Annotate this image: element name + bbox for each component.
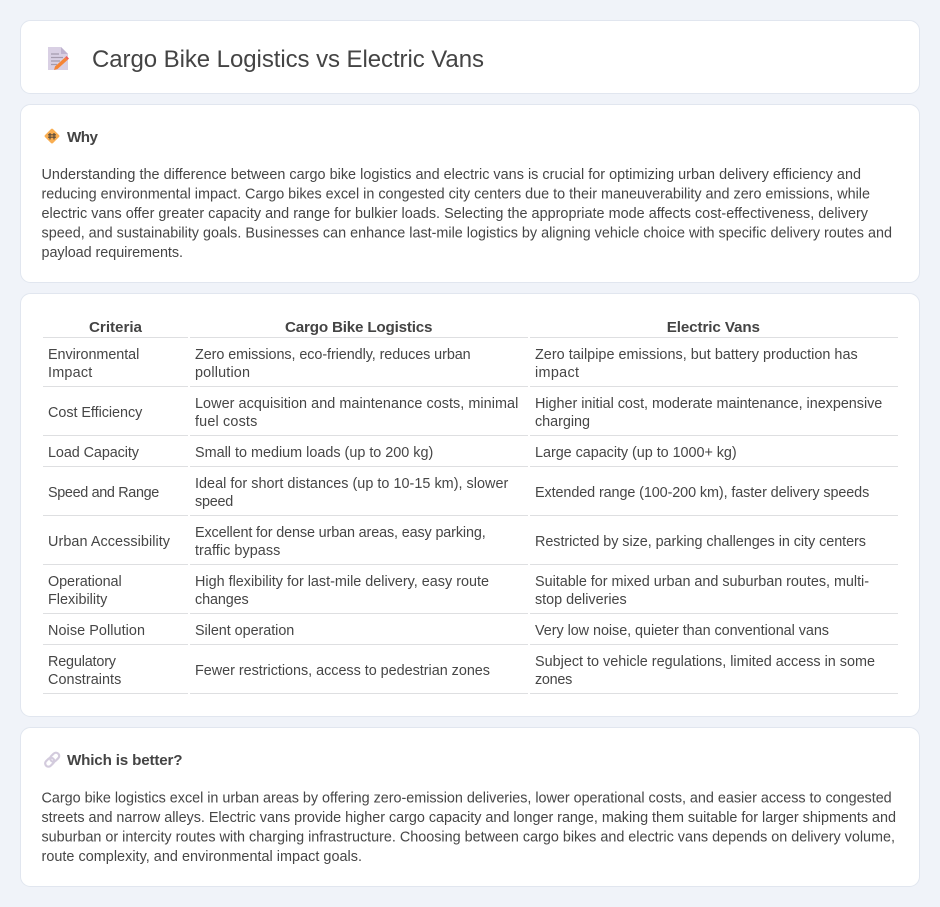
text block: which is better paragraph: route complexity, and environmental impact goals. bbox=[42, 849, 362, 865]
table header row: Criteria bbox=[89, 319, 143, 336]
row: environmental impact: Zero emissions, eco-friendly, reduces urban bbox=[195, 347, 471, 363]
table header row: Electric Vans bbox=[667, 319, 760, 336]
row: operational flexibility: stop deliveries bbox=[535, 592, 627, 608]
row: speed and range: Extended range (100-200 km), faster delivery speeds bbox=[535, 485, 869, 501]
row: operational flexibility: changes bbox=[195, 592, 249, 608]
row: load capacity bbox=[43, 445, 898, 467]
row: regulatory constraints: zones bbox=[535, 672, 572, 688]
row: cost efficiency bbox=[43, 396, 898, 436]
row: regulatory constraints: Fewer restrictions, access to pedestrian zones bbox=[195, 663, 490, 679]
row: load capacity: Large capacity (up to 1000+ kg) bbox=[535, 445, 737, 461]
title: Cargo Bike Logistics vs Electric Vans bbox=[92, 46, 484, 73]
table header row: Cargo Bike Logistics bbox=[285, 319, 432, 336]
row: operational flexibility: Suitable for mixed urban and suburban routes, multi- bbox=[535, 574, 869, 590]
row: load capacity: Small to medium loads (up to 200 kg) bbox=[195, 445, 433, 461]
row: cost efficiency: Higher initial cost, moderate maintenance, inexpensive bbox=[535, 396, 882, 412]
row: speed and range: speed bbox=[195, 494, 233, 510]
row: load capacity: Load Capacity bbox=[48, 445, 140, 461]
row: environmental impact: Impact bbox=[48, 365, 92, 381]
row: environmental impact: impact bbox=[535, 365, 579, 381]
row: operational flexibility bbox=[43, 574, 898, 614]
text block: why paragraph: electric vans offer greater capacity and range for bulkier loads. Selecting the appropriate mode affects cost-effectiveness, delivery bbox=[42, 206, 869, 222]
row: urban accessibility bbox=[43, 525, 898, 565]
text block: which is better paragraph: suburban or intercity routes with charging infrastructure. Choosing between cargo bikes and electric vans depends on delivery volume, bbox=[42, 830, 895, 846]
heading: why: Why bbox=[67, 129, 99, 146]
text block: why paragraph bbox=[42, 167, 892, 261]
row: operational flexibility: High flexibility for last-mile delivery, easy route bbox=[195, 574, 489, 590]
row: regulatory constraints: Constraints bbox=[48, 672, 121, 688]
row: noise pollution bbox=[43, 623, 898, 645]
text block: which is better paragraph bbox=[42, 790, 896, 865]
row: regulatory constraints: Regulatory bbox=[48, 654, 117, 670]
panel: which is better bbox=[20, 728, 920, 886]
row: cost efficiency: Lower acquisition and maintenance costs, minimal bbox=[195, 396, 518, 412]
row: urban accessibility: Urban Accessibility bbox=[48, 534, 171, 550]
row: environmental impact bbox=[43, 347, 898, 387]
row: regulatory constraints: Subject to vehicle regulations, limited access in some bbox=[535, 654, 875, 670]
row: environmental impact: pollution bbox=[195, 365, 250, 381]
panel: header bbox=[20, 20, 920, 94]
row: noise pollution: Noise Pollution bbox=[48, 623, 145, 639]
panel: comparison table bbox=[20, 294, 920, 716]
row: cost efficiency: charging bbox=[535, 414, 590, 430]
icon: orange diamond sign bbox=[44, 128, 60, 144]
row: noise pollution: Very low noise, quieter than conventional vans bbox=[535, 623, 829, 639]
text block: which is better paragraph: Cargo bike logistics excel in urban areas by offering zero-emission deliveries, lower operational costs, and easier access to congested bbox=[42, 790, 892, 806]
row: speed and range bbox=[43, 476, 898, 516]
row: environmental impact: Environmental bbox=[48, 347, 139, 363]
text block: why paragraph: Understanding the difference between cargo bike logistics and electric vans is crucial for optimizing urban delivery efficiency and bbox=[42, 167, 861, 183]
text block: why paragraph: payload requirements. bbox=[42, 245, 183, 261]
row: noise pollution: Silent operation bbox=[195, 623, 294, 639]
row: cost efficiency: Cost Efficiency bbox=[48, 405, 143, 421]
icon: chain link bbox=[44, 751, 61, 768]
icon: document with pencil bbox=[48, 47, 69, 70]
table header row bbox=[43, 319, 898, 338]
text block: which is better paragraph: streets and narrow alleys. Electric vans provide higher cargo capacity and longer range, making them suitable for larger shipments and bbox=[42, 810, 896, 826]
row: speed and range: Ideal for short distances (up to 10-15 km), slower bbox=[195, 476, 509, 492]
panel: why bbox=[20, 104, 920, 282]
row: regulatory constraints bbox=[43, 654, 898, 694]
row: environmental impact: Zero tailpipe emissions, but battery production has bbox=[535, 347, 858, 363]
heading: which is better: Which is better? bbox=[67, 752, 182, 769]
text block: why paragraph: speed, and sustainability goals. Businesses can enhance last-mile logistics by aligning vehicle choice with specific delivery routes and bbox=[42, 226, 892, 242]
row: speed and range: Speed and Range bbox=[48, 485, 159, 501]
row: urban accessibility: traffic bypass bbox=[195, 543, 280, 559]
row: urban accessibility: Restricted by size, parking challenges in city centers bbox=[535, 534, 866, 550]
row: cost efficiency: fuel costs bbox=[195, 414, 257, 430]
row: urban accessibility: Excellent for dense urban areas, easy parking, bbox=[195, 525, 486, 541]
text block: why paragraph: reducing environmental impact. Cargo bikes excel in congested city centers due to their maneuverability and zero emissions, while bbox=[42, 186, 870, 202]
row: operational flexibility: Flexibility bbox=[48, 592, 108, 608]
row: operational flexibility: Operational bbox=[48, 574, 122, 590]
